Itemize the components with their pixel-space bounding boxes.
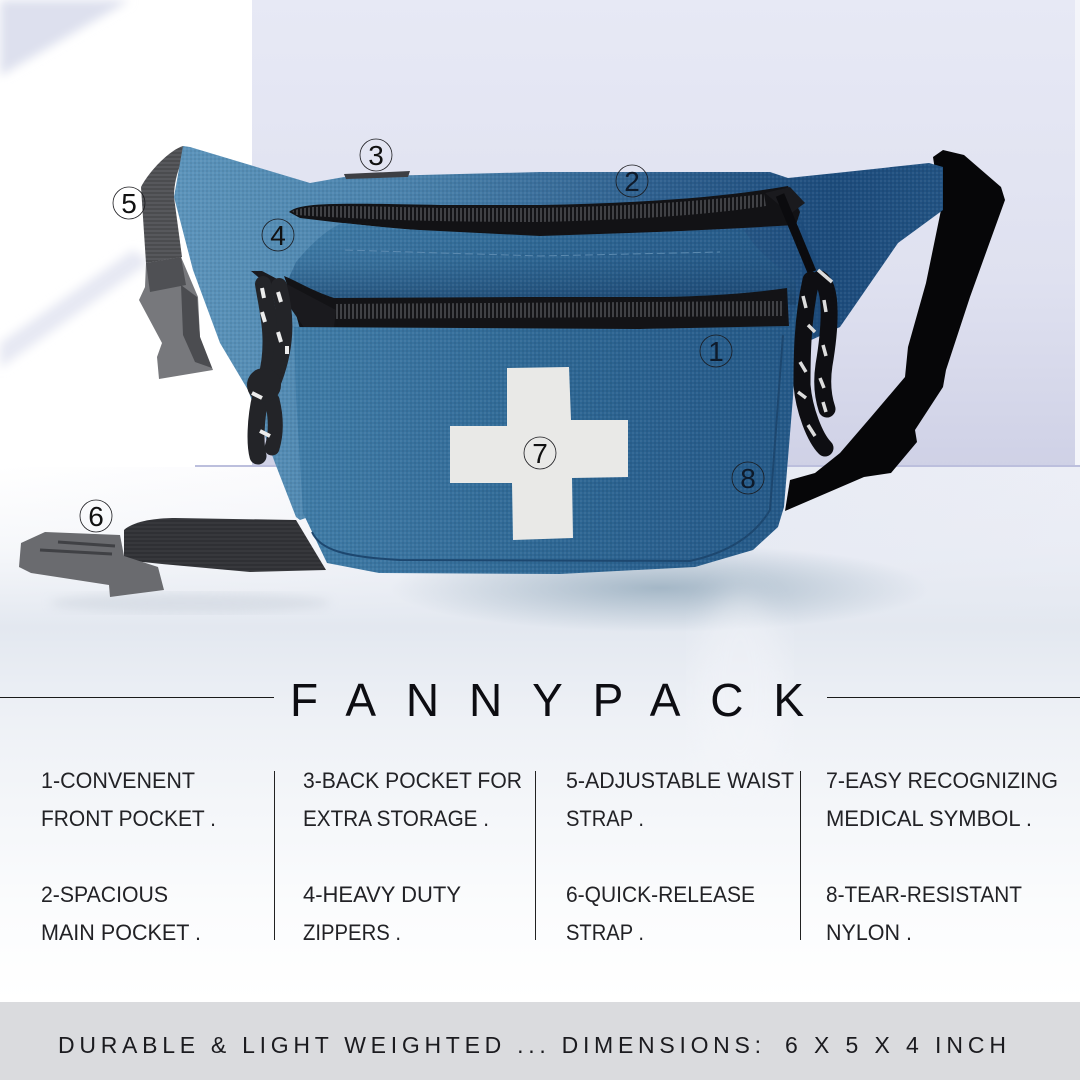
column 4: MEDICAL SYMBOL . — [826, 806, 1032, 831]
callout 2: 2 — [624, 166, 640, 197]
front zipper — [251, 271, 789, 329]
column 1: 1-CONVENENT — [41, 768, 195, 793]
left zipper pull ropes — [247, 284, 287, 456]
footer band: 6 X 5 X 4 INCH — [785, 1032, 1006, 1058]
callout 5 — [113, 187, 145, 219]
callout 6 — [80, 500, 112, 532]
callout 1: 1 — [708, 336, 724, 367]
right waist strap — [785, 150, 1005, 511]
main zipper — [289, 186, 805, 237]
column 4: NYLON . — [826, 920, 912, 945]
right zipper pull ropes — [780, 195, 832, 448]
column 1: 2-SPACIOUS — [41, 882, 168, 907]
callout 8 — [732, 462, 764, 494]
upper flap of front pocket — [288, 223, 796, 305]
callout 6: 6 — [88, 501, 104, 532]
column 2: 3-BACK POCKET FOR — [303, 768, 522, 793]
front pocket panel — [294, 300, 798, 574]
callout 3 — [360, 139, 392, 171]
column 3 — [566, 768, 794, 945]
footer band — [0, 1002, 1080, 1080]
photo: first-aid fanny pack — [19, 146, 1005, 597]
column 3: STRAP . — [566, 920, 644, 945]
column 2: EXTRA STORAGE . — [303, 806, 489, 831]
callout 3: 3 — [368, 140, 384, 171]
column 2: ZIPPERS . — [303, 920, 401, 945]
callout 7 — [524, 437, 556, 469]
bottom left strap with buckle — [19, 518, 326, 597]
column 3: 5-ADJUSTABLE WAIST — [566, 768, 794, 793]
column 1 — [41, 768, 216, 945]
column 2: 4-HEAVY DUTY — [303, 882, 461, 907]
left strap with buckle — [139, 146, 213, 379]
column 4 — [826, 768, 1058, 945]
callout 4 — [262, 219, 294, 251]
feature list — [41, 768, 1058, 945]
back body and wings — [174, 146, 943, 520]
callout 5: 5 — [121, 188, 137, 219]
callout 4: 4 — [270, 220, 286, 251]
column 4: 7-EASY RECOGNIZING — [826, 768, 1058, 793]
callout 8: 8 — [740, 463, 756, 494]
column 3: STRAP . — [566, 806, 644, 831]
callout 7: 7 — [532, 438, 548, 469]
icon: white medical cross — [450, 367, 628, 540]
title: FANNYPACK with side rules: FANNYPACK — [290, 674, 804, 726]
callout numbers on the photo — [80, 139, 764, 532]
column 3: 6-QUICK-RELEASE — [566, 882, 755, 907]
footer band: DURABLE & LIGHT WEIGHTED ... DIMENSIONS: — [58, 1032, 761, 1058]
column 1: FRONT POCKET . — [41, 806, 216, 831]
callout 1 — [700, 335, 732, 367]
column 2 — [303, 768, 522, 945]
column 1: MAIN POCKET . — [41, 920, 201, 945]
column 4: 8-TEAR-RESISTANT — [826, 882, 1022, 907]
callout 2 — [616, 165, 648, 197]
